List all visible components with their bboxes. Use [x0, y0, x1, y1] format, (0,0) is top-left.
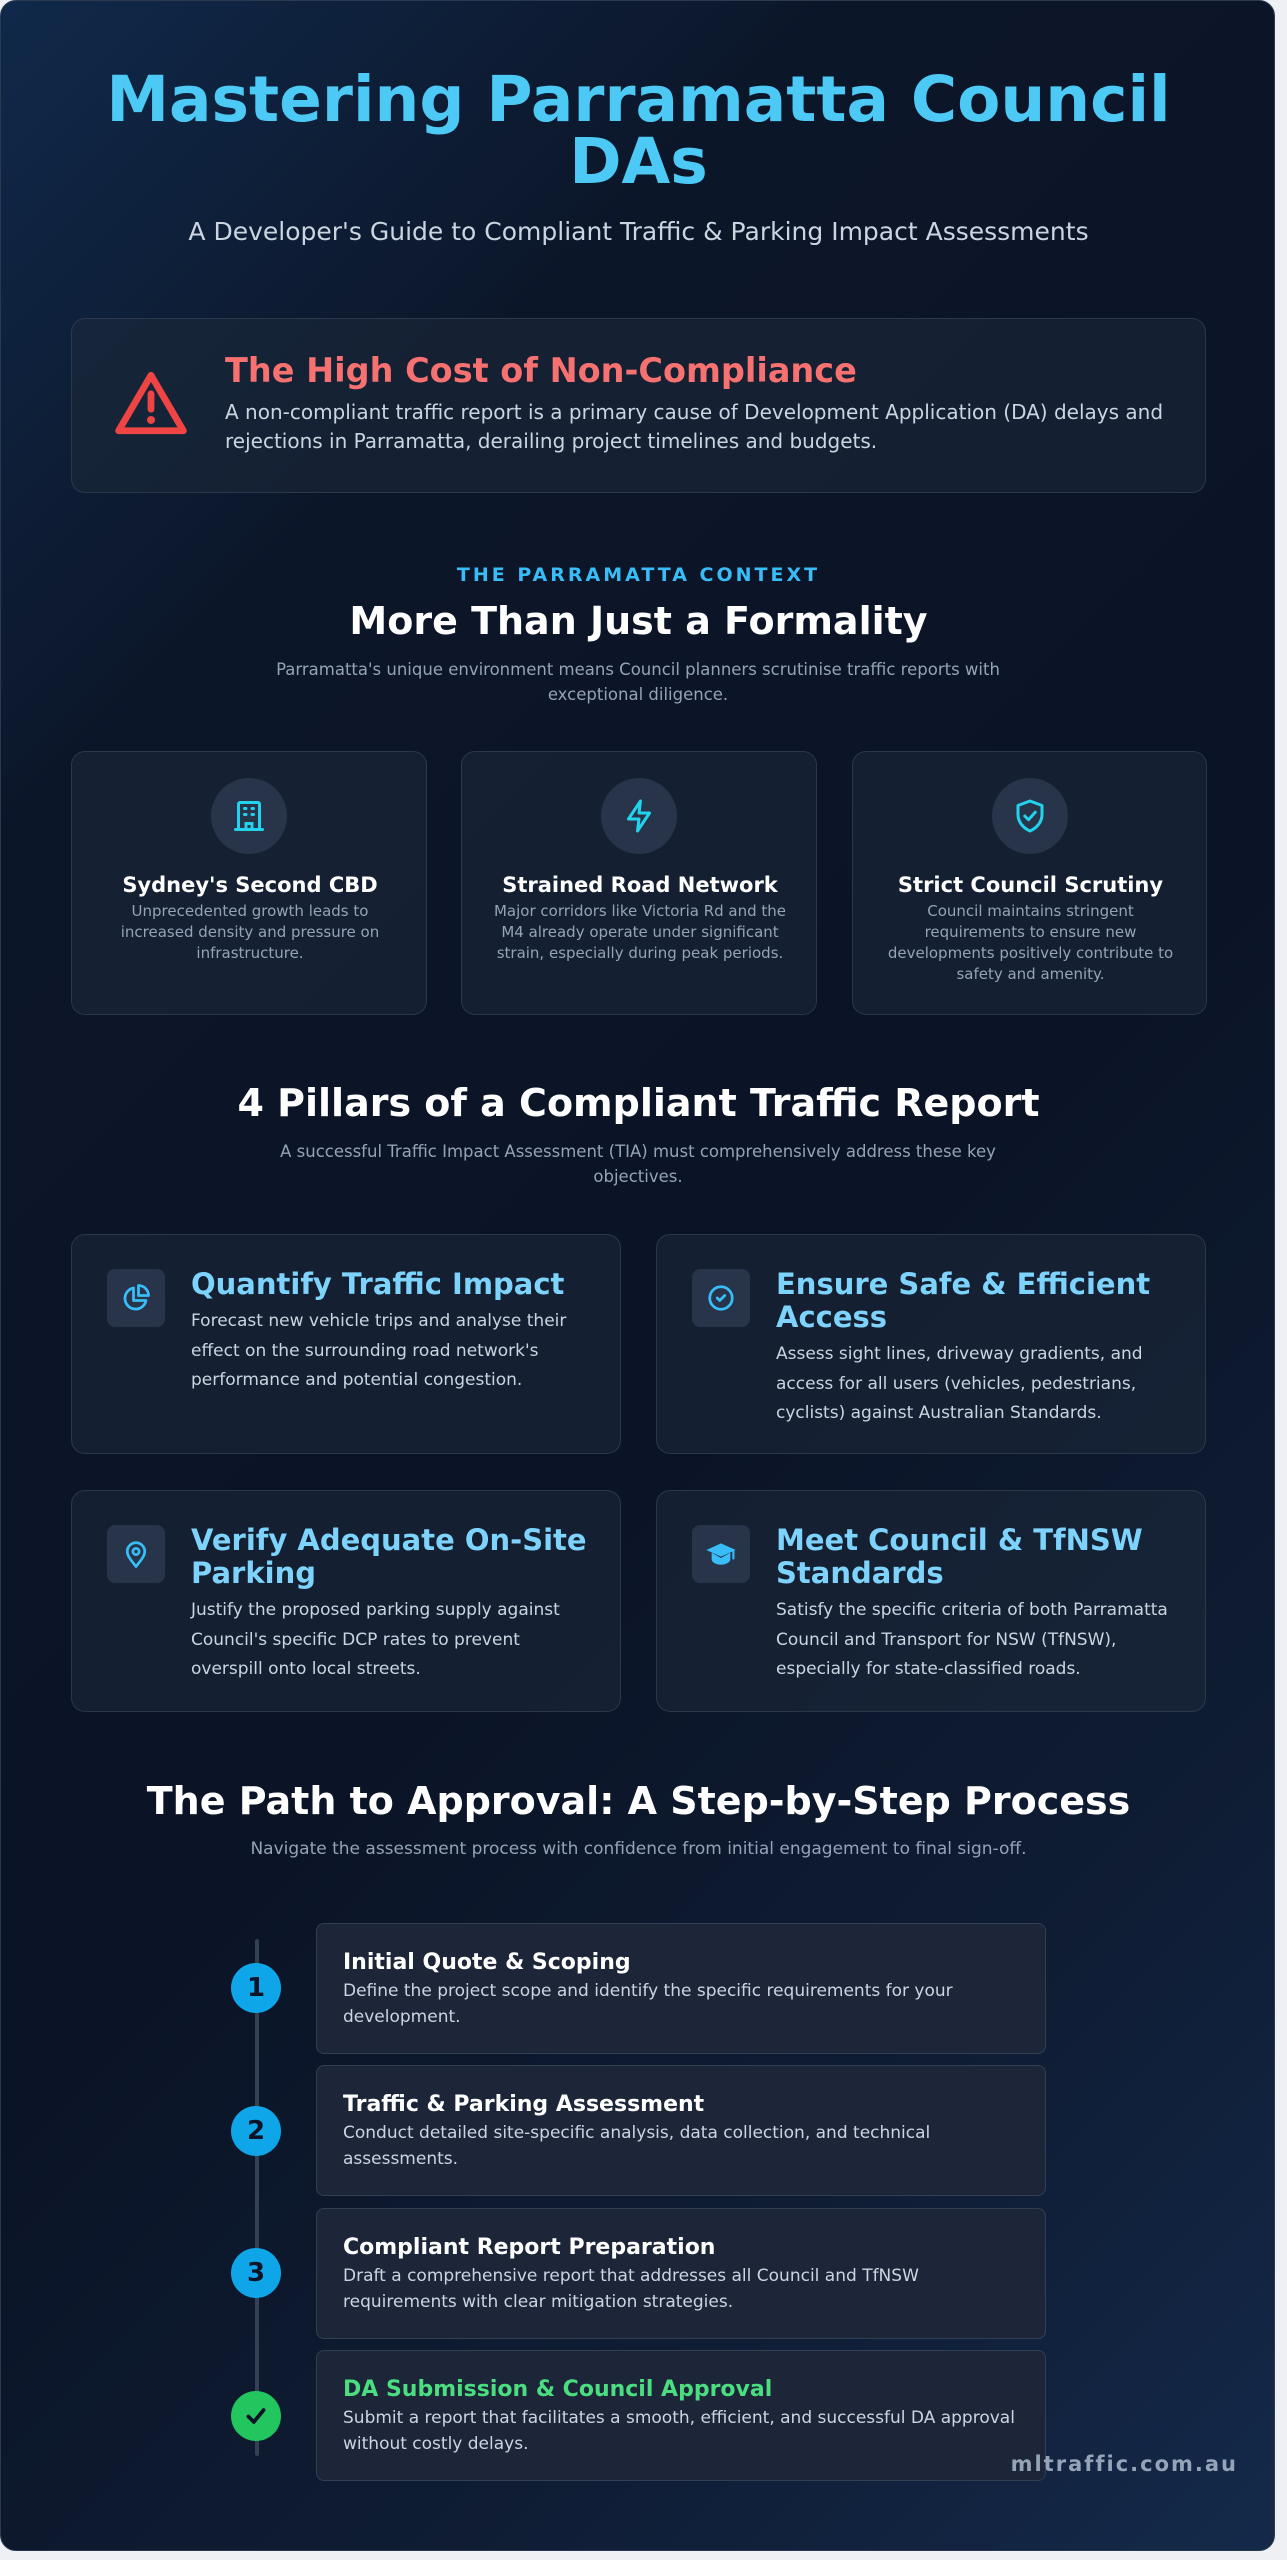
- step 1 marker: [231, 1963, 281, 2013]
- context description: Parramatta's unique environment means Council planners scrutinise traffic reports with exceptional diligence.: [276, 660, 1000, 704]
- step 1: [316, 1923, 1046, 2054]
- pillars description: A successful Traffic Impact Assessment (TIA) must comprehensively address these key objectives.: [280, 1142, 996, 1186]
- pillar: Meet Council & TfNSW Standards: Meet Council & TfNSW Standards: [776, 1523, 1143, 1590]
- title: DAs: [569, 125, 708, 198]
- pillar: Verify Adequate On-Site Parking: Justify the proposed parking supply against Council's specific DCP rates to prevent overspill onto local streets.: [191, 1600, 560, 1679]
- step 3: Compliant Report Preparation: [343, 2235, 715, 2260]
- panel: Strict Council Scrutiny: Strict Council Scrutiny: [898, 873, 1163, 897]
- step 2 marker: 2: [247, 2116, 265, 2146]
- icon: check circle: [692, 1269, 750, 1327]
- heading: context: More Than Just a Formality: [349, 599, 928, 643]
- step 3: [316, 2208, 1046, 2339]
- subtitle: A Developer's Guide to Compliant Traffic & Parking Impact Assessments: [188, 217, 1089, 246]
- step 2: Conduct detailed site-specific analysis, data collection, and technical assessments.: [343, 2123, 930, 2169]
- panel: Sydney's Second CBD: Sydney's Second CBD: [122, 873, 378, 897]
- pillar: Verify Adequate On-Site Parking: [71, 1490, 621, 1712]
- pillar: Ensure Safe & Efficient Access: [656, 1234, 1206, 1454]
- panel: Strict Council Scrutiny: [852, 751, 1207, 1015]
- step 1 marker: 1: [247, 1973, 265, 2003]
- icon: graduation cap: [692, 1525, 750, 1583]
- eyebrow label: THE PARRAMATTA CONTEXT: [457, 564, 820, 586]
- timeline: [255, 1939, 259, 2456]
- icon: shield: [992, 778, 1068, 854]
- pillar: Meet Council & TfNSW Standards: [656, 1490, 1206, 1712]
- panel: Strained Road Network: [461, 751, 817, 1015]
- heading: pillars: 4 Pillars of a Compliant Traffic Report: [237, 1081, 1040, 1125]
- icon: pie chart: [107, 1269, 165, 1327]
- step 2: Traffic & Parking Assessment: [343, 2092, 704, 2117]
- alert heading: The High Cost of Non-Compliance: [225, 351, 857, 390]
- pillar: Quantify Traffic Impact: Quantify Traffic Impact: [191, 1267, 564, 1301]
- panel: Strict Council Scrutiny: Council maintains stringent requirements to ensure new developments positively contribute to safety and amenity.: [888, 902, 1173, 983]
- panel: Sydney's Second CBD: [71, 751, 427, 1015]
- step 4 marker: check: [231, 2391, 281, 2441]
- step 4: [316, 2350, 1046, 2481]
- title: [106, 63, 1171, 198]
- step 1: Initial Quote & Scoping: [343, 1950, 631, 1975]
- pillar: Verify Adequate On-Site Parking: Verify Adequate On-Site Parking: [191, 1523, 587, 1590]
- step 3 marker: 3: [247, 2258, 265, 2288]
- alert text: A non-compliant traffic report is a primary cause of Development Application (DA) delays and rejections in Parramatta, derailing project timelines and budgets.: [225, 400, 1163, 453]
- title: Mastering Parramatta Council: [106, 63, 1171, 136]
- panel: Sydney's Second CBD: Unprecedented growth leads to increased density and pressure on infrastructure.: [121, 902, 379, 962]
- pillar: Quantify Traffic Impact: [71, 1234, 621, 1454]
- step 2 marker: [231, 2106, 281, 2156]
- step 4: DA Submission & Council Approval: [343, 2377, 772, 2402]
- icon: building: [211, 778, 287, 854]
- icon: location pin: [107, 1525, 165, 1583]
- pillar: Ensure Safe & Efficient Access: Assess sight lines, driveway gradients, and access for all users (vehicles, pedestrians, cyclists) against Australian Standards.: [776, 1344, 1143, 1423]
- panel: Strained Road Network: Major corridors like Victoria Rd and the M4 already operate under significant strain, especially during peak periods.: [494, 902, 786, 962]
- icon: warning: [115, 372, 187, 434]
- step 3: Draft a comprehensive report that addresses all Council and TfNSW requirements with clear mitigation strategies.: [343, 2266, 919, 2312]
- panel: Strained Road Network: Strained Road Network: [502, 873, 778, 897]
- pillar: Ensure Safe & Efficient Access: Ensure Safe & Efficient Access: [776, 1267, 1150, 1334]
- alert panel: [71, 318, 1206, 493]
- pillar: Quantify Traffic Impact: Forecast new vehicle trips and analyse their effect on the surrounding road network's performance and potential congestion.: [191, 1311, 566, 1390]
- footer brand: mltraffic.com.au: [1011, 2452, 1238, 2476]
- step 4: Submit a report that facilitates a smooth, efficient, and successful DA approval without costly delays.: [343, 2408, 1015, 2454]
- step 3 marker: [231, 2248, 281, 2298]
- step 2: [316, 2065, 1046, 2196]
- step 1: Define the project scope and identify the specific requirements for your development.: [343, 1981, 953, 2027]
- heading: path to approval: The Path to Approval: A Step-by-Step Process: [147, 1779, 1130, 1823]
- pillar: Meet Council & TfNSW Standards: Satisfy the specific criteria of both Parramatta Council and Transport for NSW (TfNSW), especially for state-classified roads.: [776, 1600, 1168, 1679]
- process description: Navigate the assessment process with confidence from initial engagement to final sign-off.: [250, 1839, 1027, 1859]
- icon: lightning: [601, 778, 677, 854]
